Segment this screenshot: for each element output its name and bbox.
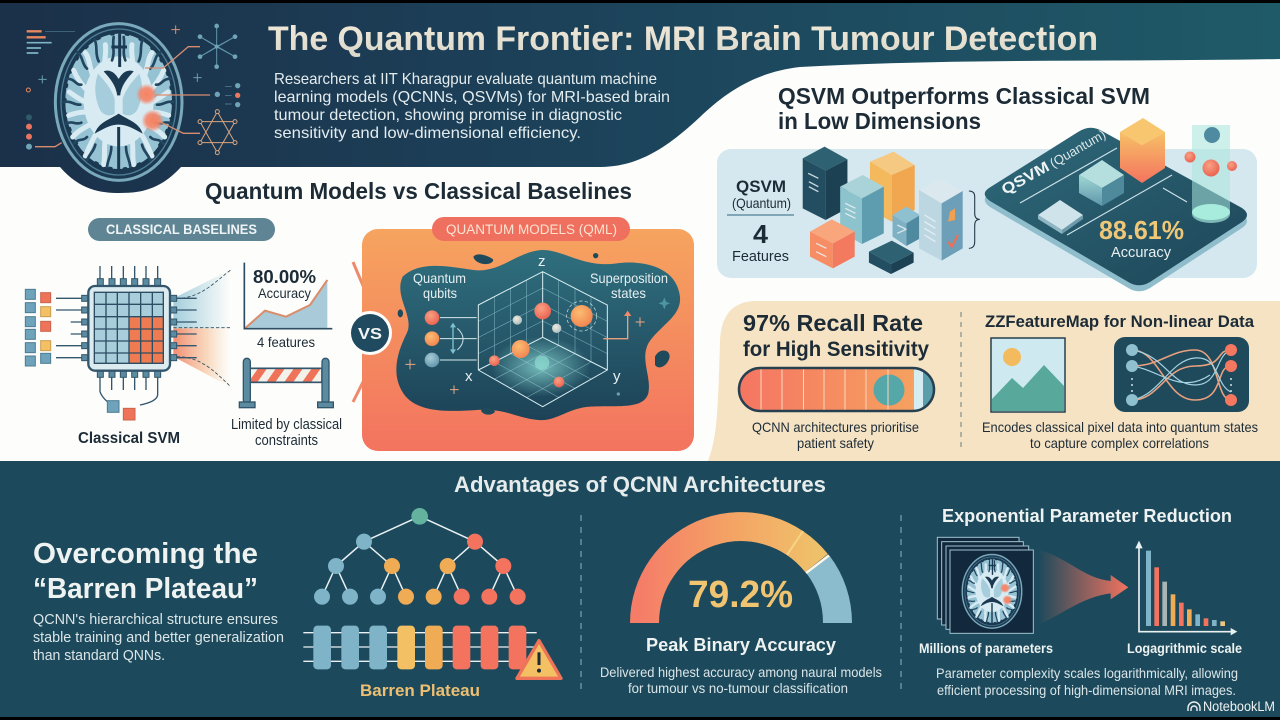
text block: axis labels and callouts: x bbox=[465, 368, 473, 385]
icon: QCNN hierarchy and circuit bbox=[303, 508, 561, 678]
panel: classical baselines bbox=[25, 218, 342, 449]
text block: axis labels and callouts: states bbox=[611, 285, 646, 301]
text block: axis labels and callouts: z bbox=[538, 253, 546, 270]
label: quantum models pill bbox=[432, 217, 630, 241]
panel: QSVM comparison bbox=[717, 118, 1257, 291]
icon: quantum platform: Accuracy bbox=[1111, 245, 1172, 261]
text block: limited by classical constraints: Limited by classical bbox=[231, 416, 342, 433]
label: millions of parameters: Millions of parameters bbox=[919, 641, 1053, 656]
stat: QSVM 4 features: QSVM bbox=[736, 177, 786, 196]
card background bbox=[708, 301, 1280, 461]
decorative connector strokes behind card bbox=[353, 262, 364, 402]
text block: intro bbox=[274, 71, 670, 142]
icon: vs badge: VS bbox=[358, 326, 382, 343]
heading: recall rate: 97% Recall Rate bbox=[743, 310, 923, 336]
stat: QSVM 4 features: 4 bbox=[753, 219, 769, 249]
label: classical baselines pill: CLASSICAL BASELINES bbox=[106, 222, 257, 237]
text block: intro: tumour detection, showing promise in diagnostic bbox=[274, 107, 622, 124]
text block: feature map caption: Encodes classical pixel data into quantum states bbox=[982, 419, 1258, 435]
chart: accuracy gauge bbox=[644, 527, 838, 623]
icon: feature map circuit bbox=[1114, 337, 1249, 412]
text block: limited by classical constraints bbox=[231, 416, 342, 449]
heading: exponential parameter reduction: Exponential Parameter Reduction bbox=[942, 505, 1232, 526]
label: classical baselines pill bbox=[88, 218, 275, 241]
text block: barren plateau body: QCNN's hierarchical structure ensures bbox=[33, 611, 278, 628]
text block: intro: learning models (QCNNs, QSVMs) for MRI-based brain bbox=[274, 89, 670, 106]
chart: 3D quantum state space bbox=[396, 250, 680, 420]
text block: gauge caption: Delivered highest accuracy among naural models bbox=[600, 664, 882, 680]
icon: quantum platform: QSVM bbox=[999, 158, 1052, 198]
heading: QSVM outperforms: QSVM Outperforms Classical SVM bbox=[778, 83, 1150, 109]
title: The Quantum Frontier: MRI Brain Tumour Detection bbox=[268, 20, 1098, 58]
watermark: NotebookLM: NotebookLM bbox=[1203, 699, 1275, 714]
text block: feature map caption: to capture complex correlations bbox=[1030, 435, 1209, 451]
heading: barren plateau bbox=[33, 538, 258, 605]
text block: recall caption: patient safety bbox=[797, 435, 874, 451]
icon: quantum platform bbox=[985, 118, 1247, 291]
icon: MRI stack to bar chart bbox=[937, 537, 1237, 635]
text block: intro: sensitivity and low-dimensional efficiency. bbox=[274, 125, 581, 142]
heading: models vs baselines: Quantum Models vs Classical Baselines bbox=[205, 178, 632, 204]
panel: advantages of QCNN bbox=[0, 461, 1280, 720]
label: quantum models pill: QUANTUM MODELS (QML) bbox=[446, 222, 617, 237]
text block: feature map caption bbox=[982, 419, 1258, 451]
label: classical SVM: Classical SVM bbox=[78, 430, 180, 447]
heading: ZZFeatureMap: ZZFeatureMap for Non-linear Data bbox=[985, 312, 1255, 331]
icon: pixel picture bbox=[991, 338, 1065, 412]
card background bbox=[0, 461, 1280, 720]
icon: quantum platform: 88.61% bbox=[1099, 215, 1184, 245]
chart: classical accuracy: 4 features bbox=[257, 334, 315, 350]
text block: parameter caption bbox=[936, 665, 1238, 698]
text block: axis labels and callouts: qubits bbox=[423, 285, 457, 301]
text block: barren plateau body: stable training and better generalization bbox=[33, 629, 284, 646]
text block: gauge caption bbox=[600, 664, 882, 696]
chart: classical accuracy bbox=[244, 263, 332, 350]
text block: parameter caption: Parameter complexity scales logarithmically, allowing bbox=[936, 665, 1238, 681]
text block: recall caption: QCNN architectures prioritise bbox=[752, 419, 919, 435]
text block: axis labels and callouts: Quantum bbox=[413, 270, 466, 286]
heading: recall rate bbox=[743, 310, 929, 361]
stat: QSVM 4 features bbox=[727, 177, 794, 265]
text block: axis labels and callouts: y bbox=[613, 368, 621, 385]
icon: quantum platform: (Quantum) bbox=[1047, 127, 1108, 171]
label: barren plateau: Barren Plateau bbox=[360, 681, 480, 700]
icon: isometric data blocks bbox=[803, 147, 980, 274]
text block: gauge caption: for tumour vs no-tumour classification bbox=[628, 680, 848, 696]
heading: QSVM outperforms bbox=[778, 83, 1150, 134]
icon: vs badge bbox=[348, 311, 392, 355]
heading: advantages: Advantages of QCNN Architectures bbox=[454, 472, 826, 497]
text block: limited by classical constraints: constraints bbox=[255, 432, 318, 449]
label: logarithmic scale: Logagrithmic scale bbox=[1127, 641, 1242, 656]
text block: axis labels and callouts: Superposition bbox=[590, 270, 668, 286]
stat: QSVM 4 features: Features bbox=[732, 248, 789, 265]
text block: intro: Researchers at IIT Kharagpur evaluate quantum machine bbox=[274, 71, 657, 88]
heading: QSVM outperforms: in Low Dimensions bbox=[778, 108, 981, 134]
text block: parameter caption: efficient processing of high-dimensional MRI images. bbox=[937, 682, 1236, 698]
stat: QSVM 4 features: (Quantum) bbox=[732, 195, 791, 211]
heading: barren plateau: “Barren Plateau” bbox=[33, 573, 258, 605]
label: peak binary accuracy: Peak Binary Accuracy bbox=[646, 635, 836, 655]
card background bbox=[362, 229, 694, 451]
chart: accuracy gauge: 79.2% bbox=[688, 574, 793, 616]
icon: barrier bbox=[239, 358, 333, 408]
card background bbox=[717, 149, 1257, 278]
chart: classical accuracy: Accuracy bbox=[258, 285, 311, 301]
text block: barren plateau body bbox=[33, 611, 284, 664]
icon: annotated brain scan bbox=[26, 24, 240, 180]
text block: barren plateau body: than standard QNNs. bbox=[33, 647, 165, 664]
icon: classical SVM chip bbox=[25, 266, 231, 420]
chart: recall bar bbox=[739, 368, 934, 411]
text block: recall caption bbox=[752, 419, 919, 451]
panel: recall and feature map bbox=[708, 301, 1280, 461]
heading: recall rate: for High Sensitivity bbox=[743, 338, 929, 361]
heading: barren plateau: Overcoming the bbox=[33, 538, 258, 570]
chart: classical accuracy: 80.00% bbox=[253, 266, 316, 287]
panel: header banner bbox=[0, 0, 1280, 193]
text block: axis labels and callouts bbox=[413, 253, 668, 385]
panel: quantum models bbox=[353, 217, 694, 451]
